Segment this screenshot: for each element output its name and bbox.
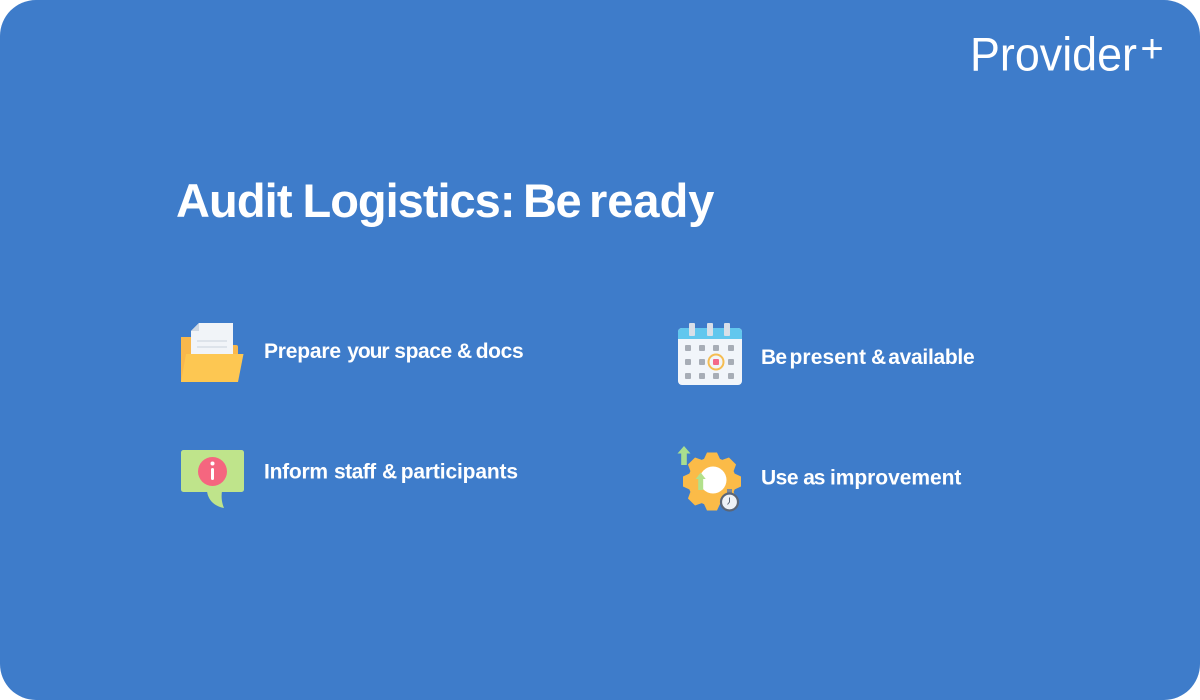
label: present: present (790, 346, 872, 369)
label: prepare: your (347, 340, 393, 363)
logo: Provider+: + (1140, 27, 1164, 71)
title: Be (523, 174, 592, 227)
label: improvement: improvement (830, 466, 961, 490)
label: inform: participants (401, 460, 518, 484)
label: improvement: as (803, 466, 829, 490)
icon: gear with arrows and stopwatch (678, 446, 741, 510)
icon: calendar (678, 323, 742, 385)
label: prepare: & (457, 340, 478, 363)
label: present: Be (761, 346, 791, 369)
item: be present and available (678, 323, 974, 385)
icon: info speech bubble (181, 450, 244, 508)
label: inform: Inform (264, 460, 333, 484)
label: prepare: docs (476, 340, 523, 363)
label: inform: & (382, 460, 403, 484)
label: prepare: Prepare (264, 340, 346, 363)
title: Audit (176, 174, 304, 227)
item: inform staff and participants (181, 450, 518, 508)
label: present: & (871, 346, 892, 369)
title: ready (589, 174, 714, 227)
item: prepare your space and docs (181, 323, 523, 382)
label: inform: staff (334, 460, 381, 484)
label: prepare: space (394, 340, 457, 363)
title: Logistics: (302, 174, 527, 227)
label: present: available (888, 346, 974, 369)
item: use as improvement (678, 446, 961, 510)
label: improvement: Use (761, 466, 803, 490)
icon: folder with document (181, 323, 244, 382)
logo: Provider+: Provider (970, 28, 1137, 80)
